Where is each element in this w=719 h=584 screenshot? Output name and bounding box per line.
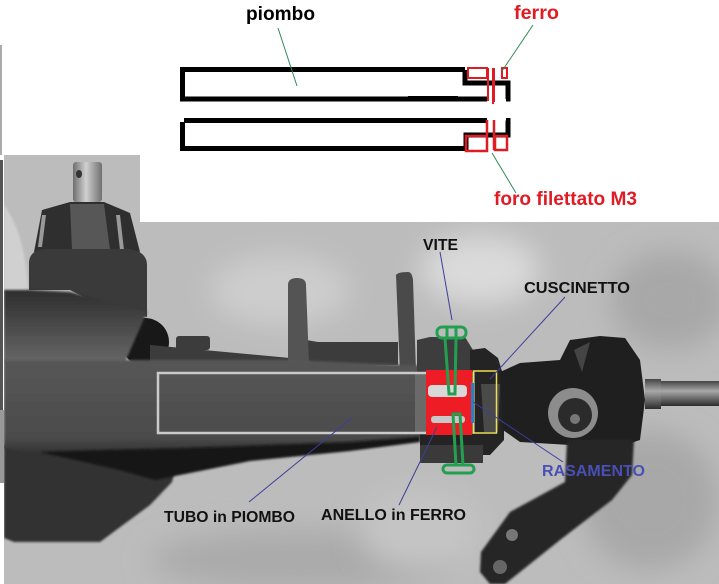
leader: CUSCINETTO [490,297,565,379]
label: ANELLO in FERRO: ANELLO in FERRO [321,507,466,524]
leader: piombo [278,28,297,86]
label: RASAMENTO: RASAMENTO [542,463,645,480]
upper screw [437,327,466,394]
right mount [500,336,645,445]
label: ferro: ferro [514,2,559,24]
shim [471,383,474,423]
diagram: lower section [182,120,508,151]
tube body [4,360,430,456]
bearing shading [481,384,500,432]
threaded rod [645,379,719,409]
leader: VITE [440,252,452,320]
label: CUSCINETTO: CUSCINETTO [524,280,630,297]
photo background [4,155,719,584]
iron ring block [426,370,472,435]
light shape at far left [4,205,28,290]
bracket post right [396,272,416,372]
tube outline [158,373,426,433]
diagram: upper section [182,68,508,104]
leader: TUBO in PIOMBO [249,417,353,502]
sphere and small peg [126,318,210,362]
label: piombo: piombo [246,4,315,25]
label: TUBO in PIOMBO: TUBO in PIOMBO [164,509,295,526]
bracket post left [288,278,309,363]
label: VITE: VITE [423,237,458,254]
leader: ferro [502,25,533,71]
iron ring, upper [468,68,507,104]
leader: RASAMENTO [473,402,563,462]
screw disc [548,388,598,438]
knob with metal pin [29,162,147,317]
hub blocks [415,337,504,463]
shadow under tube [40,436,420,480]
left edge strip [0,45,4,483]
steering arm [480,440,634,584]
iron ring, lower [466,120,507,151]
lower screw [443,414,474,473]
shoulder of body [4,290,147,362]
photo: steering assembly [4,155,719,584]
label: foro filettato M3: foro filettato M3 [494,189,637,210]
knuckle highlight [574,342,590,372]
bearing outline [474,371,496,433]
leader: ANELLO in FERRO [399,427,437,505]
upper web between posts [150,340,398,365]
lower blob [4,445,175,542]
leader: foro filettato [492,153,516,193]
